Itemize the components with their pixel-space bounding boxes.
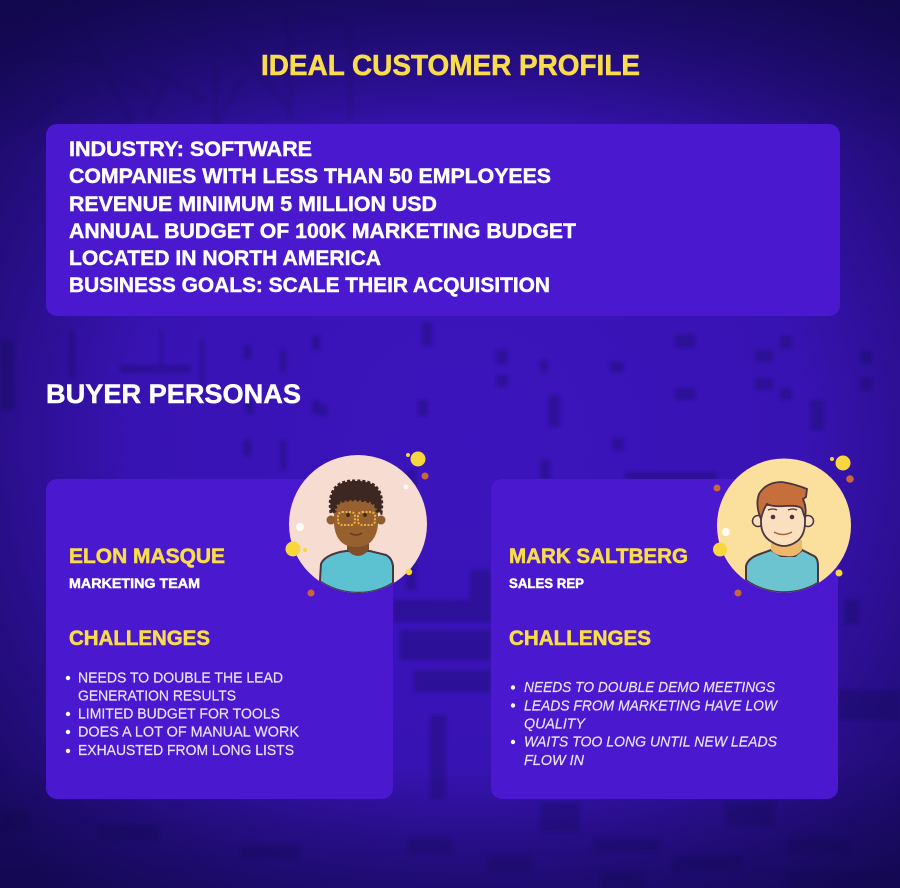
challenges list: GENERATION RESULTS <box>78 688 236 704</box>
challenges list: LEADS FROM MARKETING HAVE LOW <box>524 698 778 714</box>
challenges list <box>66 670 299 759</box>
challenges list: EXHAUSTED FROM LONG LISTS <box>78 743 294 759</box>
persona name: MARK SALTBERG <box>509 545 688 568</box>
challenges list: FLOW IN <box>524 753 585 769</box>
challenges list: LIMITED BUDGET FOR TOOLS <box>78 706 280 722</box>
panel: persona Elon Masque <box>46 479 393 799</box>
persona role: SALES REP <box>509 576 584 591</box>
challenges list: NEEDS TO DOUBLE DEMO MEETINGS <box>524 680 775 696</box>
heading: buyer personas: BUYER PERSONAS <box>46 379 301 409</box>
profile criteria text: ANNUAL BUDGET OF 100K MARKETING BUDGET <box>69 220 576 243</box>
profile criteria text: REVENUE MINIMUM 5 MILLION USD <box>69 193 437 216</box>
icon: avatar Elon Masque <box>286 452 428 596</box>
challenges heading: CHALLENGES <box>509 627 651 650</box>
persona name: ELON MASQUE <box>69 545 225 568</box>
panel: company profile <box>46 124 840 316</box>
title: IDEAL CUSTOMER PROFILE <box>261 50 640 82</box>
persona role: MARKETING TEAM <box>69 576 200 591</box>
profile criteria text: LOCATED IN NORTH AMERICA <box>69 247 381 270</box>
challenges heading: CHALLENGES <box>69 627 210 650</box>
challenges list: DOES A LOT OF MANUAL WORK <box>78 724 299 740</box>
icon: avatar Mark Saltberg <box>713 456 854 596</box>
profile criteria text: BUSINESS GOALS: SCALE THEIR ACQUISITION <box>69 274 550 297</box>
profile criteria text: COMPANIES WITH LESS THAN 50 EMPLOYEES <box>69 165 551 188</box>
profile criteria text: INDUSTRY: SOFTWARE <box>69 138 312 161</box>
challenges list: QUALITY <box>524 716 586 732</box>
profile criteria text <box>69 138 576 297</box>
challenges list <box>511 680 778 769</box>
challenges list: NEEDS TO DOUBLE THE LEAD <box>78 670 283 686</box>
challenges list: WAITS TOO LONG UNTIL NEW LEADS <box>524 734 777 750</box>
panel: persona Mark Saltberg <box>491 479 838 799</box>
